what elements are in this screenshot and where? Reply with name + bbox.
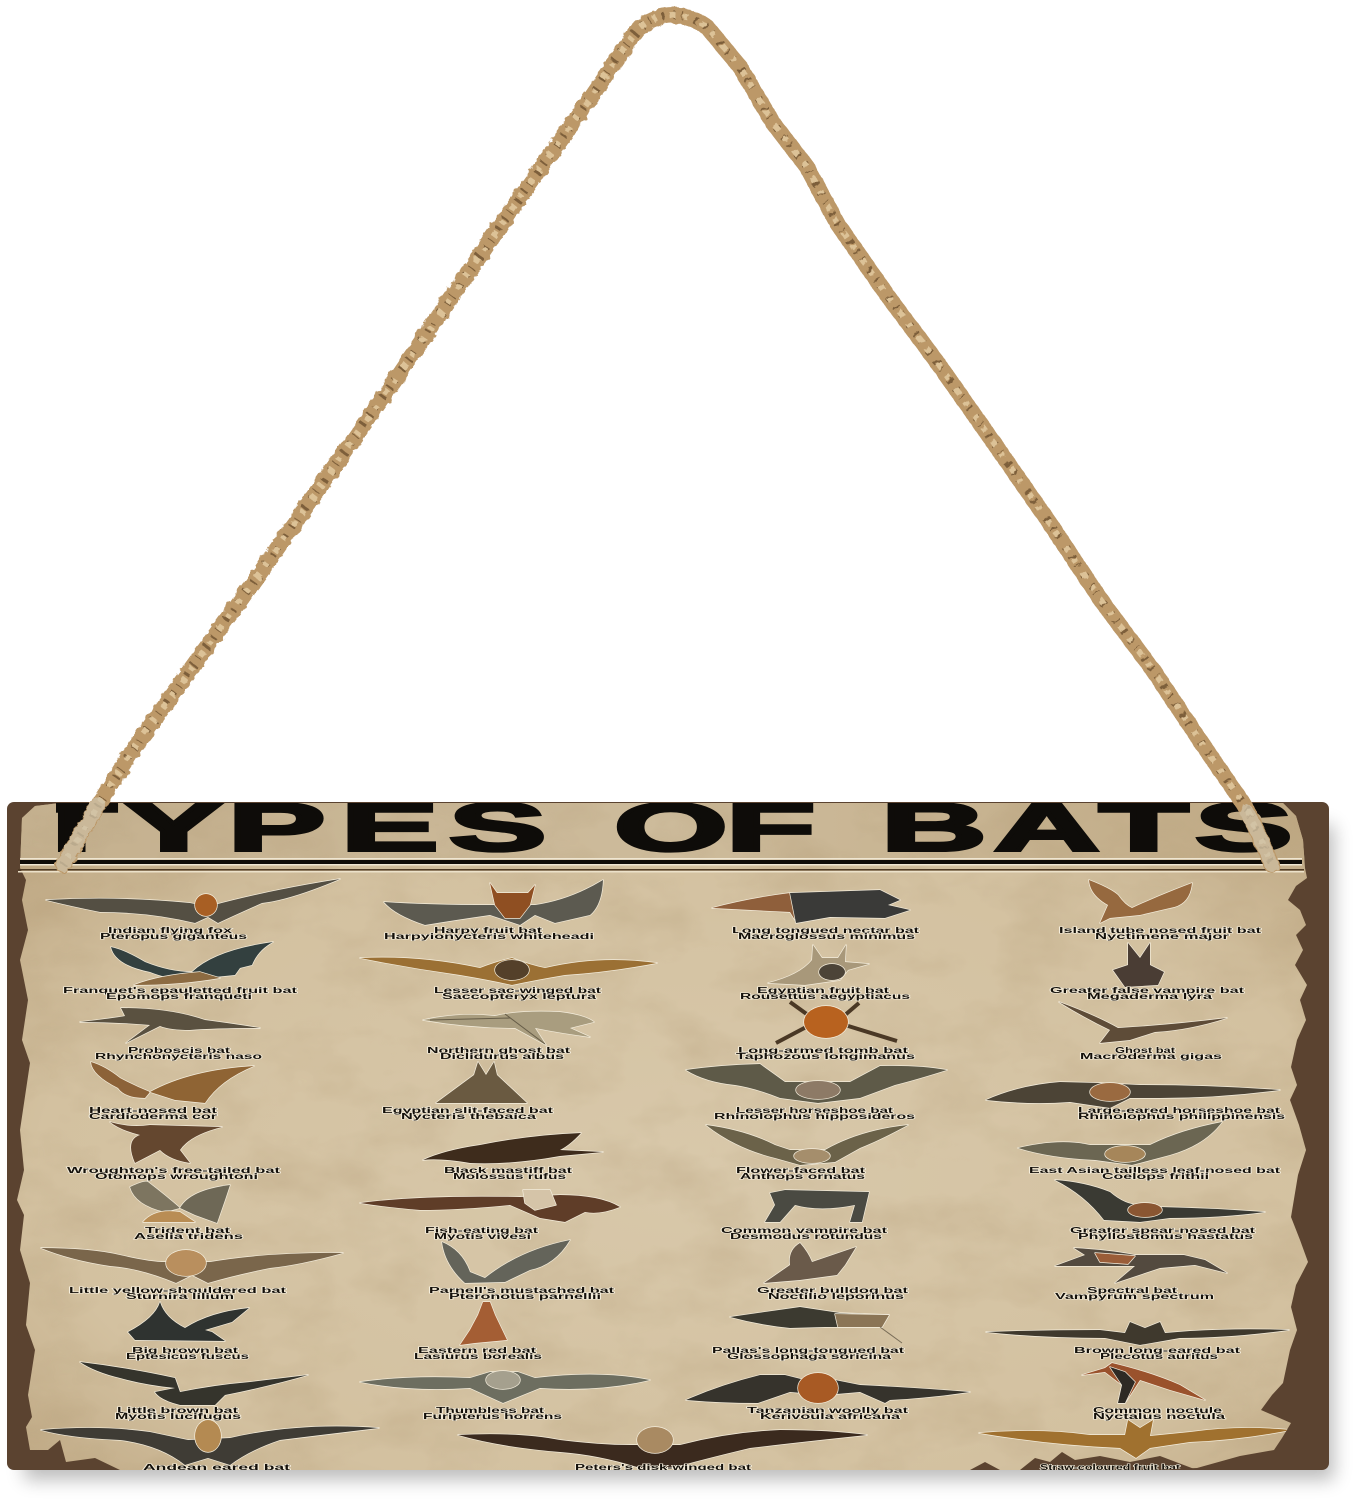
title rule [18,858,1304,872]
label: Eptesicus fuscus [126,1352,250,1361]
label: Diclidurus albus [440,1052,565,1061]
entry: Egyptian fruit bat [740,945,911,1001]
label: Heart-nosed bat [89,1106,218,1115]
bat: Fish-eating bat [360,1190,620,1222]
entry: Common vampire bat [721,1190,888,1241]
label [423,1406,563,1421]
entry: Greater bulldog bat [757,1243,909,1301]
bat: Harpy fruit bat [384,880,603,925]
entry: Proboscis bat [80,1008,262,1061]
entry: Andean eared bat [41,1420,379,1472]
label: Egyptian slit-faced bat [382,1106,554,1115]
bat: Eastern red bat [460,1302,507,1345]
bat: Wroughton's free-tailed bat [110,1122,222,1163]
label: Franquet's epauletted fruit bat [63,986,298,995]
label: Brown long-eared bat [1074,1346,1241,1355]
label: Egyptian fruit bat [757,986,890,995]
entry: Straw-coloured fruit bat [979,1420,1291,1472]
label [1078,1106,1286,1121]
label: Rhinolophus hipposideros [714,1112,916,1121]
label [434,986,602,1001]
entry: Lesser sac-winged bat [360,957,657,1001]
label: Kerivoula africana [760,1412,901,1421]
label [429,1286,615,1301]
bat: East Asian tailless leaf-nosed bat [1018,1122,1222,1165]
label: Anthops ornatus [740,1172,866,1181]
bat: Greater bulldog bat [764,1243,856,1283]
bat: Common vampire bat [765,1190,869,1222]
label: Greater bulldog bat [757,1286,909,1295]
label [732,926,920,941]
label [736,1046,916,1061]
label [712,1346,905,1361]
label: Trident bat [145,1226,231,1235]
label [95,1046,262,1061]
label: Sturnira lilium [126,1292,234,1301]
label: Plecotus auritus [1100,1352,1219,1361]
entry: Greater false vampire bat [1050,943,1245,1001]
label [1074,1346,1241,1361]
entry: Spectral bat [1055,1248,1227,1301]
label [384,926,594,941]
bat: Peters's disk-winged bat [458,1427,867,1468]
entry: Fish-eating bat [360,1190,620,1241]
entry: Franquet's epauletted fruit bat [63,942,298,1001]
label [1093,1406,1226,1421]
label: Fish-eating bat [425,1226,539,1235]
label [1029,1166,1281,1181]
label: Greater spear-nosed bat [1070,1226,1256,1235]
label [382,1106,554,1121]
label: Molossus rufus [453,1172,567,1181]
label: Furipterus horrens [423,1412,563,1421]
entry: Island tube nosed fruit bat [1059,880,1262,941]
label [444,1166,573,1181]
label: Spectral bat [1087,1286,1178,1295]
label [115,1406,242,1421]
label [736,1166,866,1181]
label: Black mastiff bat [444,1166,573,1175]
label: Phyllostomus hastatus [1078,1232,1254,1241]
bat: Proboscis bat [80,1008,260,1043]
label: Proboscis bat [128,1046,231,1055]
label: Little yellow-shouldered bat [69,1286,287,1295]
label: Cardioderma cor [89,1112,217,1121]
entry: Eastern red bat [414,1302,543,1361]
label: Big brown bat [132,1346,239,1355]
entry: Lesser horseshoe bat [686,1064,947,1121]
label: Peters's disk-winged bat [575,1463,752,1472]
bat: Large-eared horseshoe bat [986,1082,1280,1108]
bat: Long-armed tomb bat [776,1002,897,1043]
entry: Long tongued nectar bat [712,890,920,941]
label: Megaderma lyra [1087,992,1213,1001]
label: Lesser sac-winged bat [434,986,602,995]
label [1070,1226,1256,1241]
entry: Pallas's long-tongued bat [712,1307,905,1361]
bat: Northern ghost bat [423,1012,594,1045]
bat: Greater spear-nosed bat [1055,1180,1265,1222]
entry: Wroughton's free-tailed bat [67,1122,281,1181]
bat: Pallas's long-tongued bat [730,1307,902,1343]
bat: Ghost bat [1059,1002,1227,1043]
label: Epomops franqueti [106,992,252,1001]
entry: Trident bat [130,1182,244,1241]
entry: Large-eared horseshoe bat [986,1082,1286,1121]
label [67,1166,281,1181]
label [714,1106,916,1121]
bat: Big brown bat [128,1302,249,1341]
label: Eastern red bat [418,1346,537,1355]
bat: Spectral bat [1055,1248,1227,1283]
jute hanging rope [63,15,1272,865]
bat: Flower-faced bat [706,1125,908,1165]
label [1059,926,1262,941]
label: Thumbless bat [436,1406,545,1415]
label: Nyctimene major [1095,932,1229,941]
title: TYPES OF BATS [27,790,1292,865]
bat: Heart-nosed bat [91,1062,254,1103]
entry: Flower-faced bat [706,1125,908,1181]
entry: Greater spear-nosed bat [1055,1180,1265,1241]
label [721,1226,888,1241]
label [740,986,911,1001]
label: Lesser horseshoe bat [736,1106,894,1115]
label: Pallas's long-tongued bat [712,1346,905,1355]
label: Vampyrum spectrum [1055,1292,1214,1301]
entry: Ghost bat [1059,1002,1227,1061]
label: Pteropus giganteus [100,932,248,941]
entry: Egyptian slit-faced bat [382,1062,554,1121]
label [1050,986,1245,1001]
bat: Island tube nosed fruit bat [1089,880,1192,923]
entry: Thumbless bat [360,1371,650,1421]
label: Lasiurus borealis [414,1352,543,1361]
label: Noctilio leporinus [768,1292,905,1301]
bat: Long tongued nectar bat [712,890,910,923]
label: Andean eared bat [143,1463,291,1472]
label: Harpy fruit bat [434,926,543,935]
entry: Big brown bat [126,1302,250,1361]
entry: Northern ghost bat [423,1012,594,1061]
label: Desmodus rotundus [730,1232,883,1241]
label: Rousettus aegyptiacus [740,992,911,1001]
label: Nycteris thebaica [401,1112,537,1121]
label: Common vampire bat [721,1226,888,1235]
label [427,1046,571,1061]
entry: Black mastiff bat [423,1133,603,1181]
entry: Parnell's mustached bat [429,1240,615,1301]
label [757,1286,909,1301]
label: Little brown bat [117,1406,239,1415]
bat: Andean eared bat [41,1420,379,1465]
label: Northern ghost bat [427,1046,571,1055]
bat: Lesser sac-winged bat [360,957,657,985]
label: Wroughton's free-tailed bat [67,1166,281,1175]
label [425,1226,539,1241]
label [100,926,248,941]
entry: East Asian tailless leaf-nosed bat [1018,1122,1281,1181]
label: Long-armed tomb bat [738,1046,909,1055]
label: East Asian tailless leaf-nosed bat [1029,1166,1281,1175]
entry: Common noctule [1082,1363,1226,1421]
bat: Tanzanian woolly bat [686,1373,970,1403]
entry: Indian flying fox [46,879,340,941]
bat: Straw-coloured fruit bat [979,1420,1291,1458]
label [69,1286,287,1301]
label [88,1106,218,1120]
bat: Franquet's epauletted fruit bat [111,942,273,985]
panel: aged paper [7,802,1329,1470]
bat: Parnell's mustached bat [442,1240,570,1283]
bat: Greater false vampire bat [1113,943,1164,987]
label: Straw-coloured fruit bat [1040,1463,1181,1472]
entry: Long-armed tomb bat [736,1002,916,1061]
label [63,986,298,1001]
label [133,1226,244,1240]
label: Myotis vivesi [434,1232,531,1241]
bat: Egyptian fruit bat [768,945,869,985]
label: Long tongued nectar bat [732,926,920,935]
board shadow [24,825,1334,1480]
label: Macroglossus minimus [738,932,916,941]
entry: Heart-nosed bat [89,1062,254,1121]
label [126,1346,250,1361]
wooden sign board [7,802,1329,1470]
label [414,1346,543,1361]
label: Saccopteryx leptura [442,992,597,1001]
label: Otomops wroughtoni [95,1172,258,1181]
label [747,1406,909,1421]
label: Rhinolophus philippinensis [1078,1112,1286,1121]
entry: Peters's disk-winged bat [458,1427,867,1472]
label: Coelops frithii [1102,1172,1209,1181]
label: Aselia tridens [134,1232,244,1241]
label: Harpyionycteris whiteheadi [384,932,594,941]
label: Common noctule [1093,1406,1223,1415]
label: Greater false vampire bat [1050,986,1245,995]
bat: Indian flying fox [46,879,340,923]
entry: Harpy fruit bat [384,880,603,941]
label: Glossophaga soricina [727,1352,892,1361]
label: Parnell's mustached bat [429,1286,615,1295]
entry: Little brown bat [80,1362,308,1421]
label [1080,1046,1223,1061]
bat: Thumbless bat [360,1371,650,1403]
entry: Brown long-eared bat [986,1322,1289,1361]
label: Ghost bat [1115,1046,1176,1055]
bat: Lesser horseshoe bat [686,1064,947,1103]
label: Macroderma gigas [1080,1052,1223,1061]
bat: Brown long-eared bat [986,1322,1289,1345]
label: Tanzanian woolly bat [747,1406,909,1415]
entry: Tanzanian woolly bat [686,1373,970,1421]
bat: Black mastiff bat [423,1133,603,1163]
bat: Little yellow-shouldered bat [41,1248,343,1283]
entry: Little yellow-shouldered bat [41,1248,343,1301]
bat: Common noctule [1082,1363,1205,1403]
label: Myotis lucifugus [115,1412,242,1421]
label [1055,1286,1214,1301]
label: Rhynchonycteris naso [95,1052,262,1061]
label: Flower-faced bat [736,1166,866,1175]
label: Island tube nosed fruit bat [1059,926,1262,935]
label: Indian flying fox [108,926,233,935]
label: Taphozous longimanus [736,1052,916,1061]
bat chart [41,879,1291,1472]
bat: Egyptian slit-faced bat [436,1062,527,1103]
bat: Trident bat [130,1182,230,1223]
label: Pteronotus parnellii [449,1292,601,1301]
label: Nyctalus noctula [1093,1412,1226,1421]
label: Large-eared horseshoe bat [1078,1106,1281,1115]
bat: Little brown bat [80,1362,308,1405]
